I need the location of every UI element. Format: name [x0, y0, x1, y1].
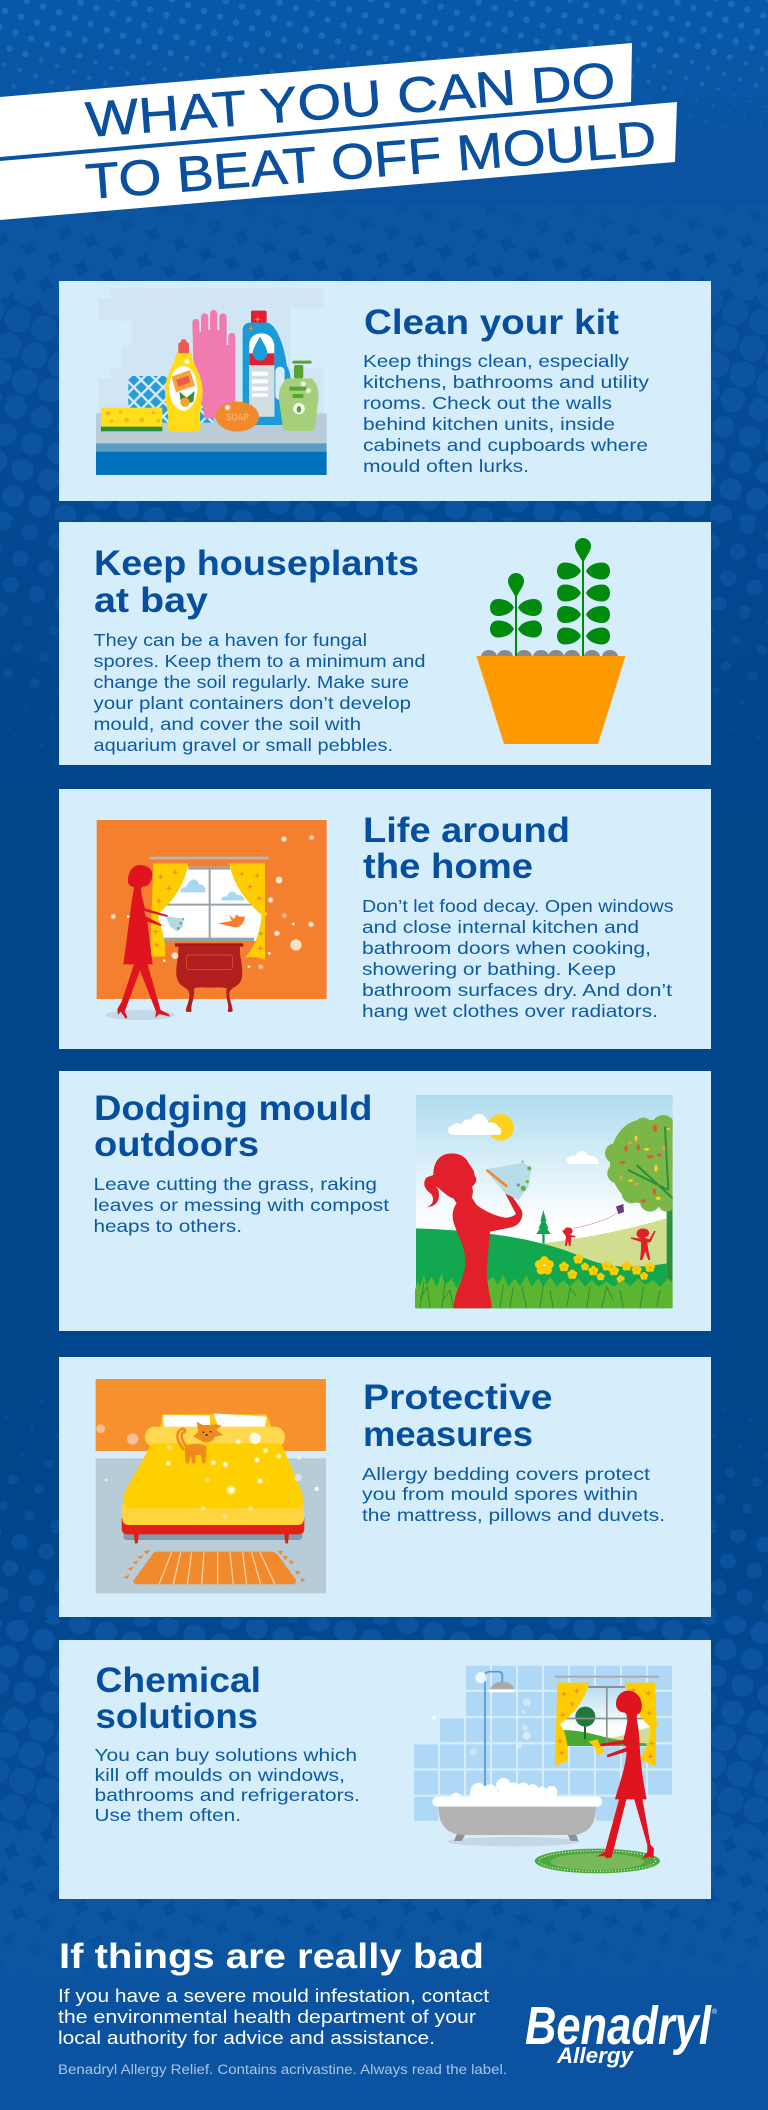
body text: behind kitchen units, inside: [363, 414, 615, 434]
panel: chemical solutions: [59, 1640, 711, 1899]
plant right: [557, 538, 610, 656]
body text: cabinets and cupboards where: [363, 435, 648, 455]
body text: aquarium gravel or small pebbles.: [94, 735, 393, 755]
floor shadow: [105, 1010, 175, 1020]
body text: the mattress, pillows and duvets.: [362, 1505, 665, 1525]
title line 2: TO BEAT OFF MOULD: [84, 110, 658, 210]
heading: the home: [363, 847, 533, 886]
body text: [58, 1986, 489, 2048]
glove: [192, 310, 235, 418]
panel: keep houseplants at bay: [59, 522, 711, 765]
pillows: [160, 1413, 273, 1430]
woman: [424, 1153, 522, 1308]
curtain rod: [555, 1676, 659, 1678]
bird: [218, 914, 245, 927]
body text: hang wet clothes over radiators.: [362, 1001, 658, 1021]
body text: bathroom surfaces dry. And don’t: [362, 980, 672, 1000]
cat: [177, 1422, 223, 1463]
illustration: woman sneezing in a meadow: [415, 1095, 675, 1308]
heading: outdoors: [94, 1125, 259, 1164]
pot: [476, 656, 626, 744]
yellow bottle: [165, 339, 203, 432]
body text: you from mould spores within: [362, 1484, 638, 1504]
title line 1: WHAT YOU CAN DO: [84, 52, 617, 148]
wall tiles: [414, 1666, 672, 1821]
body text: If you have a severe mould infestation, contact: [58, 1986, 489, 2006]
near hill: [416, 1228, 667, 1308]
bath body: [438, 1806, 596, 1835]
heading: If things are really bad: [59, 1937, 484, 1976]
rug: [123, 1550, 305, 1584]
soap dispenser: [279, 361, 319, 431]
panel: dodging mould outdoors: [59, 1071, 711, 1331]
pine tree: [536, 1210, 551, 1243]
curtain rod: [149, 857, 269, 859]
body text: Allergy bedding covers protect: [362, 1464, 650, 1484]
cloud large: [448, 1114, 501, 1135]
cloth with spores: [166, 917, 184, 932]
body text: local authority for advice and assistance.: [58, 2028, 435, 2048]
body text: mould, and cover the soil with: [94, 714, 361, 734]
soap: [216, 402, 259, 432]
cloud small: [567, 1151, 598, 1164]
heading: Clean your kit: [364, 303, 619, 342]
body text: Keep things clean, especially: [363, 351, 629, 371]
heading: [96, 1661, 261, 1736]
pebbles: [481, 650, 618, 664]
panel: protective measures: [59, 1357, 711, 1617]
duvet top: [145, 1427, 285, 1447]
heading: Dodging mould: [94, 1089, 372, 1128]
plant left: [490, 573, 542, 656]
body text: and close internal kitchen and: [362, 917, 639, 937]
body text: kill off moulds on windows,: [94, 1765, 345, 1785]
woman: [597, 1691, 654, 1859]
flowers: [535, 1254, 655, 1283]
illustration: bed with cat: [96, 1379, 326, 1593]
orange wall: [97, 820, 327, 999]
tree: [605, 1115, 675, 1308]
panel background: [59, 1357, 711, 1617]
body text: showering or bathing. Keep: [362, 959, 616, 979]
body text: [94, 1174, 389, 1236]
panel: clean your kit: [59, 281, 711, 501]
far hill: [540, 1218, 667, 1277]
counter front: [96, 443, 327, 452]
curtain right: [625, 1683, 659, 1767]
kite: [573, 1204, 624, 1228]
panel background: [59, 789, 711, 1049]
grass: [415, 1273, 673, 1308]
dust sparkles: [110, 835, 315, 970]
soap: SOAP: [226, 412, 249, 423]
banner strip 1: [0, 43, 632, 157]
heading: [94, 544, 419, 620]
curtain left: [150, 863, 188, 957]
panel background: [59, 1640, 711, 1899]
bath feet: [454, 1831, 578, 1841]
panel: life around the home: [59, 789, 711, 1049]
panel background: [59, 281, 711, 501]
curtain left: [555, 1683, 589, 1766]
sponge: [101, 408, 162, 431]
disclaimer: Benadryl Allergy Relief. Contains acrivastine. Always read the label.: [58, 2062, 507, 2077]
logo: Benadryl Allergy: Allergy: [556, 2043, 635, 2068]
heading: [363, 811, 570, 886]
logo: Benadryl Allergy: ®: [712, 2008, 718, 2016]
banner strip 2: [0, 102, 677, 220]
bath shadow: [447, 1837, 580, 1846]
body text: bathroom doors when cooking,: [362, 938, 651, 958]
body text: They can be a haven for fungal: [94, 630, 367, 650]
spore sparkles: [96, 1424, 319, 1520]
foam: [451, 1778, 557, 1803]
body text: You can buy solutions which: [94, 1745, 357, 1765]
body text: mould often lurks.: [363, 456, 529, 476]
woman: [117, 865, 170, 1019]
child with arms up: [631, 1228, 656, 1260]
panel background: [59, 1071, 711, 1331]
floor: [96, 1458, 326, 1593]
mattress band: [122, 1503, 304, 1525]
tissue: [485, 1161, 532, 1200]
window: [158, 867, 262, 941]
spores on tiles: [432, 1672, 531, 1756]
duvet: [124, 1443, 303, 1508]
shower pipe: [485, 1672, 502, 1786]
shower head: [489, 1682, 515, 1692]
red bed base: [122, 1518, 304, 1534]
panel background: [59, 522, 711, 765]
sky: [416, 1095, 673, 1308]
illustration: bathroom cleaning: [414, 1666, 672, 1873]
orange wall: [96, 1379, 326, 1451]
body text: Leave cutting the grass, raking: [94, 1174, 377, 1194]
body text: kitchens, bathrooms and utility: [363, 372, 649, 392]
heading: at bay: [94, 581, 209, 620]
body text: [363, 351, 649, 476]
illustration: cleaning products: [96, 288, 327, 475]
bed shadow: [123, 1532, 302, 1540]
body text: change the soil regularly. Make sure: [94, 672, 409, 692]
body text: rooms. Check out the walls: [363, 393, 612, 413]
illustration: potted plants: [476, 538, 626, 744]
body text: bathrooms and refrigerators.: [94, 1785, 360, 1805]
body text: spores. Keep them to a minimum and: [94, 651, 426, 671]
body text: Don’t let food decay. Open windows: [362, 896, 674, 916]
title banner: [0, 43, 677, 220]
sun: [487, 1114, 514, 1141]
body text: leaves or messing with compost: [94, 1195, 389, 1215]
body text: [94, 1745, 360, 1825]
heading: Keep houseplants: [94, 544, 419, 583]
window: [560, 1686, 652, 1746]
curtain right: [229, 863, 268, 960]
blue bottle: [243, 311, 291, 425]
yellow cloth: [588, 1739, 605, 1756]
heading: [94, 1089, 372, 1164]
heading: [363, 1378, 552, 1454]
body text: heaps to others.: [94, 1216, 242, 1236]
logo: Benadryl Allergy: Benadryl: [525, 1996, 712, 2056]
heading: solutions: [96, 1697, 258, 1736]
bath rim: [432, 1797, 602, 1807]
footer: if things are really bad: [58, 1937, 507, 2077]
body text: the environmental health department of your: [58, 2007, 476, 2027]
child with kite: [562, 1227, 575, 1246]
tile wall: [98, 288, 323, 413]
heading: measures: [363, 1415, 533, 1454]
heading: Life around: [363, 811, 570, 850]
green rug: [535, 1849, 660, 1873]
body text: [362, 1464, 665, 1525]
illustration: woman at window: [97, 820, 327, 1020]
body text: [362, 896, 674, 1021]
body text: Use them often.: [94, 1805, 241, 1825]
body text: your plant containers don’t develop: [94, 693, 411, 713]
bed legs: [133, 1532, 289, 1543]
side table: [175, 943, 243, 1012]
counter base: [96, 452, 327, 475]
counter top: [96, 413, 327, 443]
heading: Protective: [363, 1378, 552, 1417]
body text: [94, 630, 426, 755]
heading: Chemical: [96, 1661, 261, 1700]
cloth: [128, 376, 213, 423]
